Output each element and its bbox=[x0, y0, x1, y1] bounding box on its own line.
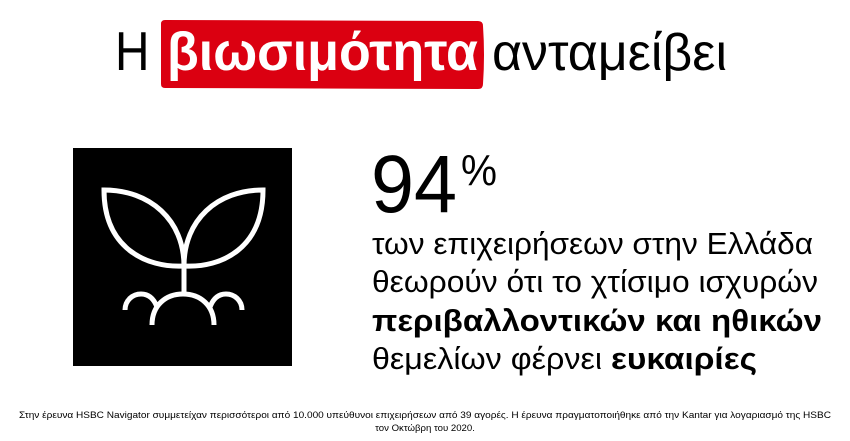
right leaf bbox=[184, 190, 263, 266]
footnote line 2: τον Οκτώβρη του 2020. bbox=[375, 423, 475, 434]
line 4: ευκαιρίες bbox=[611, 341, 757, 376]
number: 94 bbox=[371, 139, 457, 230]
left leaf bbox=[104, 190, 184, 266]
left root arc bbox=[125, 294, 157, 310]
title word: Η: Η bbox=[115, 20, 150, 82]
description text bbox=[372, 226, 822, 376]
statistic: 94% bbox=[371, 139, 497, 230]
footnote bbox=[19, 410, 831, 434]
line 4 bbox=[372, 341, 757, 376]
stem bbox=[182, 266, 186, 294]
title word: ανταμείβει: ανταμείβει bbox=[492, 24, 727, 82]
percent sign: % bbox=[461, 146, 497, 195]
red highlight with word: βιωσιμότητα bbox=[167, 22, 478, 82]
line 2: θεωρούν ότι το χτίσιμο ισχυρών bbox=[372, 264, 818, 299]
line 3: περιβαλλοντικών και ηθικών bbox=[372, 303, 822, 338]
right root arc bbox=[210, 294, 242, 310]
centre root arc bbox=[152, 294, 214, 325]
icon: sprout on black square bbox=[73, 148, 292, 366]
line 1: των επιχειρήσεων στην Ελλάδα bbox=[372, 226, 813, 261]
footnote line 1: Στην έρευνα HSBC Navigator συμμετείχαν περισσότεροι από 10.000 υπεύθυνοι επιχειρήσεων από 39 αγορές. Η έρευνα πραγματοποιήθηκε από την Kantar για λογαριασμό της HSBC bbox=[19, 410, 831, 421]
line 4: θεμελίων φέρνει bbox=[372, 341, 602, 376]
title bbox=[115, 20, 727, 89]
